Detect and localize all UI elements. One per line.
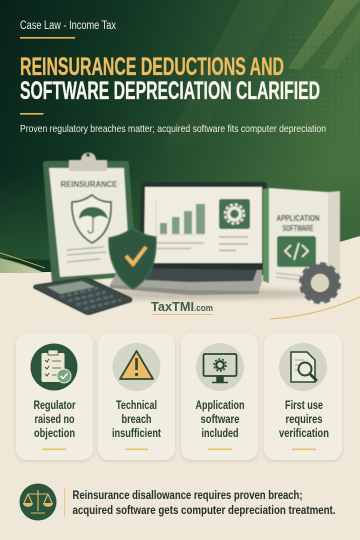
bar chart [160, 204, 205, 234]
brand logo: TaxTMI [151, 300, 194, 314]
laptop [110, 182, 267, 295]
icon: metal gear [301, 264, 339, 302]
card: regulator [16, 333, 93, 460]
software box: APPLICATION [276, 214, 320, 223]
card: breach: insufficient [112, 428, 161, 440]
icon: monitor gear [196, 343, 244, 391]
card: regulator: objection [34, 428, 75, 440]
card: breach: breach [122, 414, 152, 426]
title [20, 53, 320, 105]
illustration [34, 152, 340, 314]
conclusion text: Reinsurance disallowance requires proven breach; [72, 490, 302, 502]
card: regulator: raised no [34, 414, 74, 426]
icon: code tile [277, 236, 316, 267]
clipboard [43, 152, 137, 283]
icon: check shield [109, 228, 156, 289]
card: first use [264, 333, 342, 460]
icon: calculator [34, 278, 132, 314]
card: application software [181, 333, 258, 460]
category label: Case Law - Income Tax [20, 20, 116, 32]
card: regulator: Regulator [34, 400, 76, 412]
card: breach [98, 333, 175, 460]
icon: clipboard checklist [30, 344, 78, 390]
conclusion text [72, 490, 336, 517]
card: application software: software [200, 414, 240, 426]
card: application software: included [202, 428, 238, 440]
card: application software: Application [196, 400, 244, 412]
category underline [20, 37, 75, 39]
card: first use: First use [285, 400, 323, 412]
icon: scales of justice [20, 484, 56, 520]
footer divider [64, 488, 65, 516]
brand logo [151, 300, 213, 314]
title underline [20, 113, 44, 115]
icon: gear tile [219, 199, 250, 229]
software box: SOFTWARE [282, 224, 314, 233]
icon: umbrella shield [72, 195, 111, 243]
clipboard: REINSURANCE [60, 179, 118, 189]
software box [263, 188, 340, 288]
card: first use: verification [279, 428, 329, 440]
brand logo: .com [194, 303, 213, 314]
card: first use: requires [286, 414, 322, 426]
icon: warning triangle [112, 343, 160, 391]
icon: document magnifier [279, 343, 327, 391]
card: breach: Technical [116, 400, 157, 412]
